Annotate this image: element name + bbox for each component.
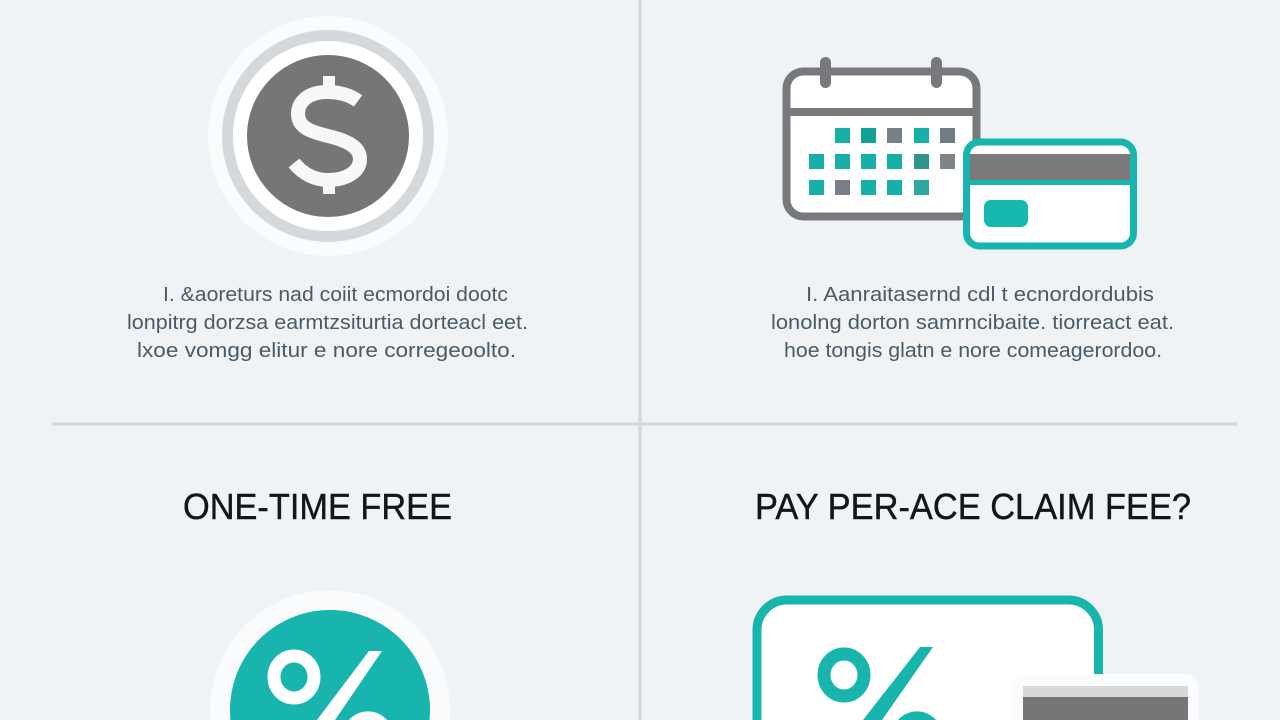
text block: top left description	[127, 284, 528, 362]
icon: percent card with payment card	[757, 600, 1199, 720]
text block: top right description: lonolng dorton samrncibaite. tiorreact eat.	[771, 312, 1174, 334]
heading: one-time fee: ONE-TIME FREE	[183, 486, 452, 527]
text block: top left description: I. &aoreturs nad coiit ecmordoi dootc	[163, 284, 508, 306]
text block: top left description: lxoe vomgg elitur e nore corregeoolto.	[137, 340, 516, 362]
icon: teal percent circle	[210, 590, 450, 720]
text block: top right description: hoe tongis glatn e nore comeagerordoo.	[784, 340, 1162, 362]
icon: calendar	[786, 57, 977, 216]
heading: pay per-use claim fee: PAY PER-ACE CLAIM FEE?	[755, 486, 1191, 527]
text block: top left description: lonpitrg dorzsa earmtzsiturtia dorteacl eet.	[127, 312, 528, 334]
text block: top right description	[771, 284, 1174, 362]
icon: payment card	[1011, 674, 1199, 720]
icon: percent document	[757, 600, 1098, 720]
text block: top right description: I. Aanraitasernd cdl t ecnordordubis	[806, 284, 1154, 306]
icon: dollar coin	[208, 16, 448, 256]
icon: credit card	[966, 142, 1134, 246]
icon: calendar with credit card	[786, 57, 1134, 246]
